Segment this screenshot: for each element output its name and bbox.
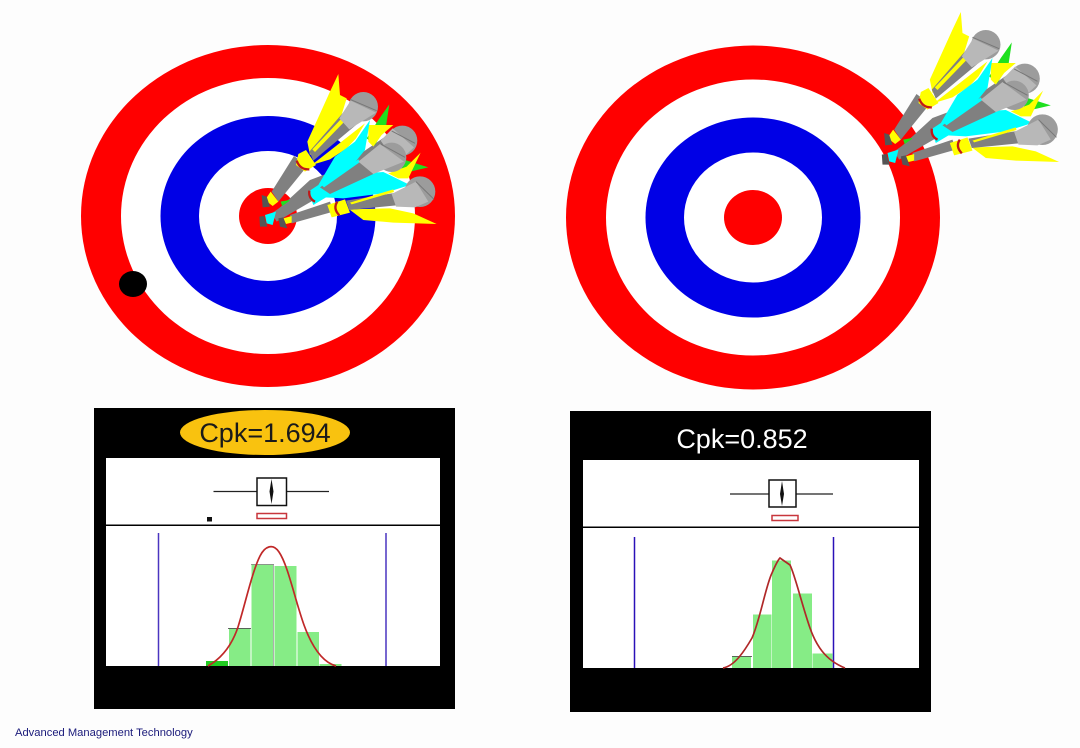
Cpk badge: [180, 410, 350, 455]
normal curve right: [723, 558, 845, 668]
specification limits right: [634, 537, 834, 668]
specification limits left: [158, 533, 386, 666]
right dart cluster: [882, 12, 1059, 166]
histogram panel right: [583, 528, 919, 668]
panel: left capability chart: [94, 408, 455, 709]
panel: right capability chart: [570, 411, 931, 712]
histogram panel left: [106, 526, 440, 666]
outlier hole on left target: [119, 271, 147, 297]
Cpk value left: Cpk=1.694: [199, 418, 331, 448]
normal curve left: [208, 547, 336, 666]
box plot panel right: [583, 460, 919, 526]
left target board: [81, 45, 455, 387]
footer credit: Advanced Management Technology: [15, 727, 193, 739]
left dart cluster: [259, 74, 437, 228]
right target board: [566, 46, 940, 390]
Cpk value right: Cpk=0.852: [676, 424, 808, 454]
box plot panel left: [106, 458, 440, 524]
